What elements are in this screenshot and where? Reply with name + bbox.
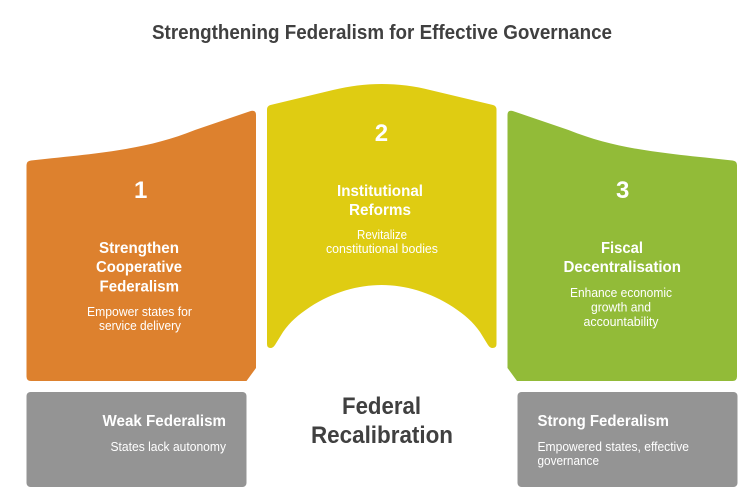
heading: strengthen cooperative federalism: Cooperative xyxy=(96,259,182,276)
heading: fiscal decentralisation: Decentralisation xyxy=(564,259,681,276)
description xyxy=(538,439,689,468)
description: Enhance economic xyxy=(570,285,672,300)
number 2: 2 xyxy=(375,120,388,147)
panel: weak federalism xyxy=(26,392,246,487)
panel shape: orange xyxy=(26,111,256,381)
description: service delivery xyxy=(99,318,181,333)
heading: fiscal decentralisation: Fiscal xyxy=(601,240,643,257)
description: Revitalize xyxy=(357,227,407,242)
heading: strengthen cooperative federalism: Strengthen xyxy=(99,240,179,257)
heading: institutional reforms: Institutional xyxy=(337,183,423,200)
heading: weak federalism: Weak Federalism xyxy=(102,413,226,430)
box: grey xyxy=(518,392,738,487)
heading: strong federalism: Strong Federalism xyxy=(538,413,669,430)
title: Strengthening Federalism for Effective Governance xyxy=(152,21,612,44)
panel shape: green xyxy=(508,111,737,381)
panel: strong federalism xyxy=(518,392,738,487)
box: grey xyxy=(26,392,246,487)
heading: institutional reforms xyxy=(337,183,423,219)
description xyxy=(87,304,193,333)
heading: institutional reforms: Reforms xyxy=(349,202,411,219)
description: accountability xyxy=(584,314,659,329)
description xyxy=(326,227,438,256)
description xyxy=(570,285,672,329)
heading: strengthen cooperative federalism: Federalism xyxy=(100,278,179,296)
center label: federal recalibration: Recalibration xyxy=(311,422,453,449)
panel: institutional reforms xyxy=(267,84,496,348)
panel: strengthen cooperative federalism xyxy=(26,111,256,381)
center label: federal recalibration: Federal xyxy=(342,393,421,420)
panel shape: yellow arch xyxy=(267,84,496,348)
description: constitutional bodies xyxy=(326,241,438,256)
panel: fiscal decentralisation xyxy=(508,111,737,381)
description: governance xyxy=(538,453,599,468)
heading: strengthen cooperative federalism xyxy=(96,240,182,296)
description: Empower states for xyxy=(87,304,193,319)
description: States lack autonomy xyxy=(110,439,226,454)
description: growth and xyxy=(591,300,651,314)
description: Empowered states, effective xyxy=(538,439,689,454)
heading: fiscal decentralisation xyxy=(564,240,681,276)
number 1: 1 xyxy=(134,177,147,204)
number 3: 3 xyxy=(616,177,629,204)
center label: federal recalibration xyxy=(311,393,453,449)
